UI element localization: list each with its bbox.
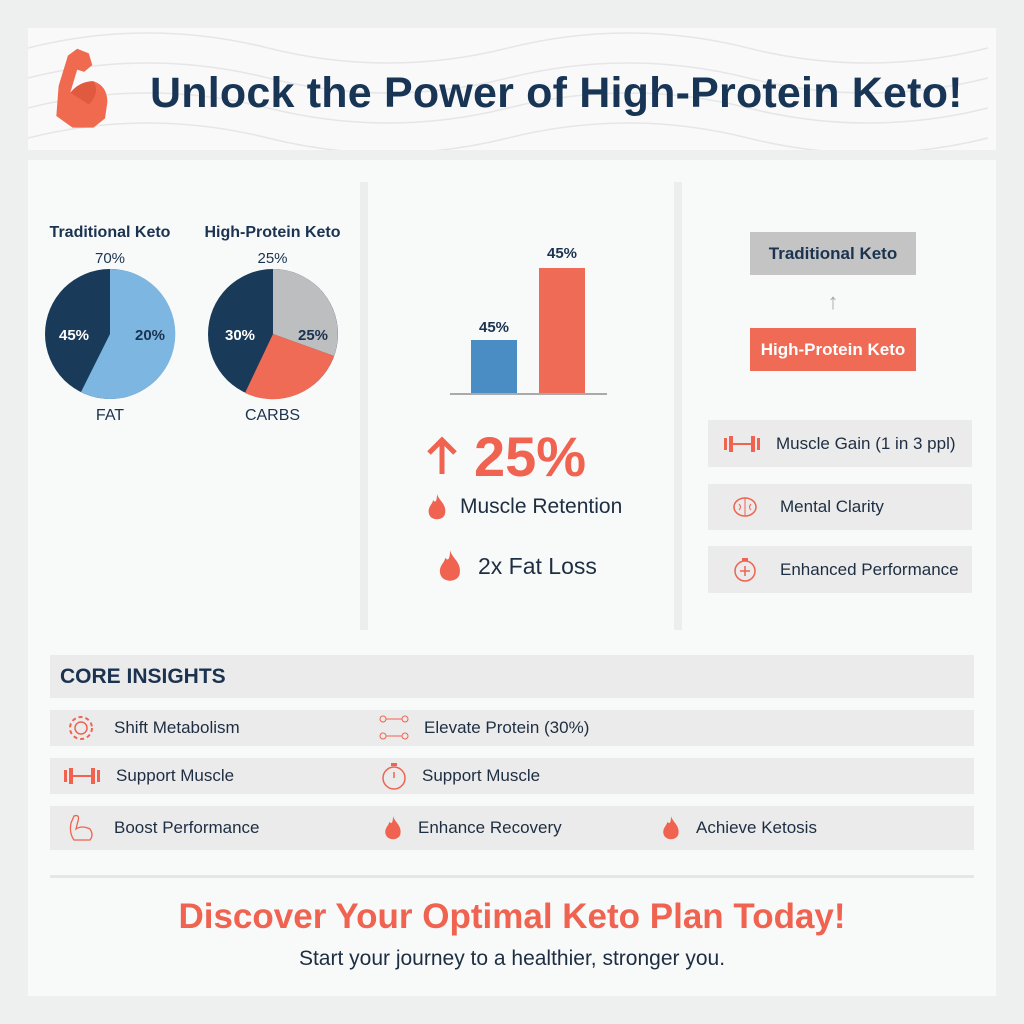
pie: traditional keto: 20% (135, 327, 165, 344)
footer call to action: Discover Your Optimal Keto Plan Today! (178, 897, 846, 936)
icon: flexed arm (56, 48, 108, 128)
panel: core insights (50, 655, 974, 850)
insight: elevate protein (380, 716, 589, 740)
pie: traditional keto: FAT (96, 407, 124, 424)
pie: traditional keto: 70% (95, 250, 125, 267)
insight: support muscle 2: Support Muscle (422, 766, 540, 785)
insight: boost performance (70, 814, 260, 841)
insight: achieve ketosis (663, 816, 817, 840)
benefit list: Enhanced Performance (780, 560, 959, 578)
insight: support muscle: Support Muscle (116, 766, 234, 785)
pie: high-protein keto: 30% (224, 327, 255, 344)
pie: high-protein keto: CARBS (245, 407, 300, 424)
insight: achieve ketosis: Achieve Ketosis (696, 818, 817, 837)
insight: support muscle 2 (382, 763, 540, 790)
pie: traditional keto: 45% (59, 327, 89, 344)
bar chart: 45% (479, 319, 509, 336)
pie: high-protein keto: High-Protein Keto (204, 224, 340, 241)
panel: pie charts (45, 224, 340, 424)
title: Unlock the Power of High-Protein Keto! (150, 69, 963, 117)
stat: 25% muscle retention (427, 424, 622, 581)
insight: support muscle (64, 766, 234, 785)
pie: high-protein keto: 25% (257, 250, 288, 267)
bar chart (450, 245, 607, 395)
pie: high-protein keto: 25% (297, 327, 328, 344)
pie: high-protein keto (204, 224, 340, 424)
bar chart: 45% (547, 245, 577, 262)
insight: enhance recovery (385, 816, 562, 840)
heading: core insights (50, 655, 974, 698)
insight: shift metabolism: Shift Metabolism (114, 718, 240, 737)
main panel (28, 160, 996, 996)
pie: traditional keto: Traditional Keto (50, 224, 170, 241)
comparison boxes: ↑ (828, 289, 838, 314)
stat: 25% muscle retention: 25% (474, 424, 586, 488)
insight: enhance recovery: Enhance Recovery (418, 818, 562, 837)
stat: 25% muscle retention: Muscle Retention (460, 495, 622, 518)
comparison boxes (750, 232, 916, 371)
insight: boost performance: Boost Performance (114, 818, 260, 837)
pie: traditional keto (45, 224, 176, 424)
insight: elevate protein: Elevate Protein (30%) (424, 718, 589, 737)
benefit list: Muscle Gain (1 in 3 ppl) (776, 434, 956, 452)
comparison boxes: Traditional Keto (769, 244, 897, 262)
stat: 25% muscle retention: 2x Fat Loss (478, 552, 597, 578)
benefit list (708, 420, 972, 593)
header panel (28, 28, 996, 150)
heading: core insights: CORE INSIGHTS (60, 664, 226, 688)
footer call to action (178, 897, 846, 970)
footer call to action: Start your journey to a healthier, stronger you. (299, 947, 725, 970)
benefit list: Mental Clarity (780, 497, 884, 516)
insight: shift metabolism (69, 716, 240, 740)
comparison boxes: High-Protein Keto (761, 340, 905, 358)
